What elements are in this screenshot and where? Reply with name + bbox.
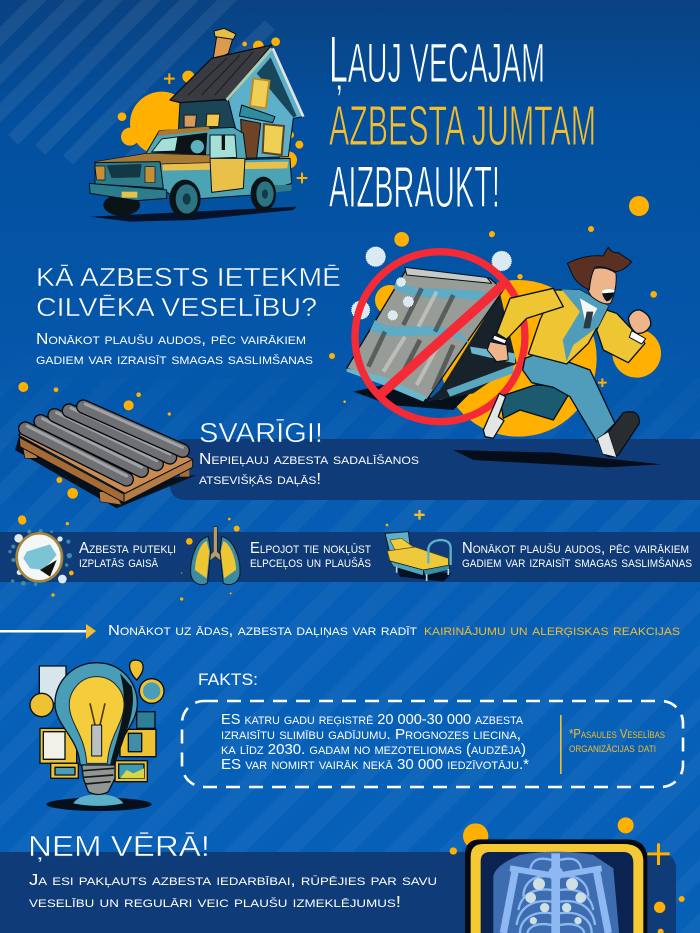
torso — [493, 852, 620, 933]
text: skin: Nonākot uz ādas, azbesta daļiņas var radīt — [108, 622, 417, 639]
illustration: light bulb — [30, 660, 164, 811]
divider — [560, 715, 562, 774]
text: fact: ES var nomirt vairāk nekā 30 000 iedzīvotāju.* — [221, 756, 529, 773]
text: skin: kairinājumu un alerģiskas reakcijas — [424, 622, 680, 639]
chimney — [213, 28, 236, 62]
text: step 1 — [79, 540, 176, 571]
text: ņem vērā: veselību un regulāri veic plaušu izmeklējumus! — [29, 894, 401, 911]
heading: ņem vērā: ŅEM VĒRĀ! — [28, 831, 210, 863]
fact box — [182, 701, 683, 787]
illustration: x-ray — [450, 817, 685, 933]
text: source — [569, 726, 665, 755]
icon: lungs — [180, 518, 240, 601]
pallet — [15, 403, 197, 508]
tiles — [25, 404, 183, 479]
text: source: *Pasaules Veselības — [569, 726, 665, 741]
text: fact: izraisītu slimību gadījumu. Prognozes liecina, — [221, 726, 521, 743]
text: step 2: elpceļos un plaušās — [250, 554, 371, 571]
title: AIZBRAUKT! — [329, 155, 500, 220]
text: skin — [108, 622, 680, 639]
text: health intro: gadiem var izraisīt smagas saslimšanas — [36, 351, 313, 368]
truck — [89, 127, 297, 222]
roof tiles — [347, 267, 517, 410]
band: ņem vērā — [0, 852, 676, 933]
heading: fakts: FAKTS: — [198, 670, 258, 689]
particles — [525, 878, 586, 924]
text: ņem vērā — [29, 872, 437, 911]
heading: health: KĀ AZBESTS IETEKMĒ — [36, 262, 341, 292]
running man — [453, 247, 662, 467]
text: step 3 — [462, 540, 692, 571]
text: source: organizācijas dati — [569, 740, 656, 755]
prohibition sign — [355, 252, 525, 422]
text: health intro: Nonākot plaušu audos, pēc vairākiem — [36, 331, 306, 348]
band: svarīgi — [170, 439, 700, 500]
base shadow — [46, 798, 152, 811]
orange circles — [343, 232, 661, 437]
heading: svarīgi: SVARĪGI! — [199, 417, 323, 448]
text: step 2 — [250, 540, 371, 571]
bones — [503, 853, 608, 933]
text: ņem vērā: Ja esi pakļauts azbesta iedarbībai, rūpējies par savu — [29, 872, 437, 889]
text: svarīgi: Nepieļauj azbesta sadalīšanos — [199, 451, 419, 468]
text: fact: ka līdz 2030. gadam no mezoteliomas (audzēja) — [221, 741, 526, 758]
arrow — [0, 624, 96, 639]
asbestos particles — [352, 247, 511, 320]
heading: health — [36, 262, 341, 322]
text: fact — [221, 711, 529, 773]
house — [170, 45, 303, 158]
text: svarīgi: atsevišķās daļās! — [199, 471, 321, 488]
text: svarīgi — [199, 451, 419, 488]
illustration: house on truck — [89, 28, 307, 222]
title — [329, 22, 596, 220]
heading: health: CILVĒKA VESELĪBU? — [36, 292, 317, 322]
text: health intro — [36, 331, 313, 368]
band: steps — [0, 532, 700, 582]
text: step 3: Nonākot plaušu audos, pēc vairākiem — [462, 540, 689, 557]
icon: hospital bed — [385, 510, 452, 582]
frame — [465, 839, 647, 933]
bulb glass — [55, 663, 137, 765]
icon: dust particle — [8, 517, 74, 597]
illustration: banned roof and running man — [343, 232, 662, 467]
illustration: asbestos roof on pallet — [15, 382, 197, 523]
decorative dots: upper — [329, 196, 649, 359]
text: fact: ES katru gadu reģistrē 20 000-30 000 azbesta — [221, 711, 524, 728]
text: step 1: izplatās gaisā — [79, 554, 159, 571]
orange blobs — [118, 37, 307, 183]
text: step 1: Azbesta putekļi — [79, 540, 176, 557]
panels — [30, 660, 164, 782]
text: step 2: Elpojot tie nokļūst — [250, 540, 371, 557]
